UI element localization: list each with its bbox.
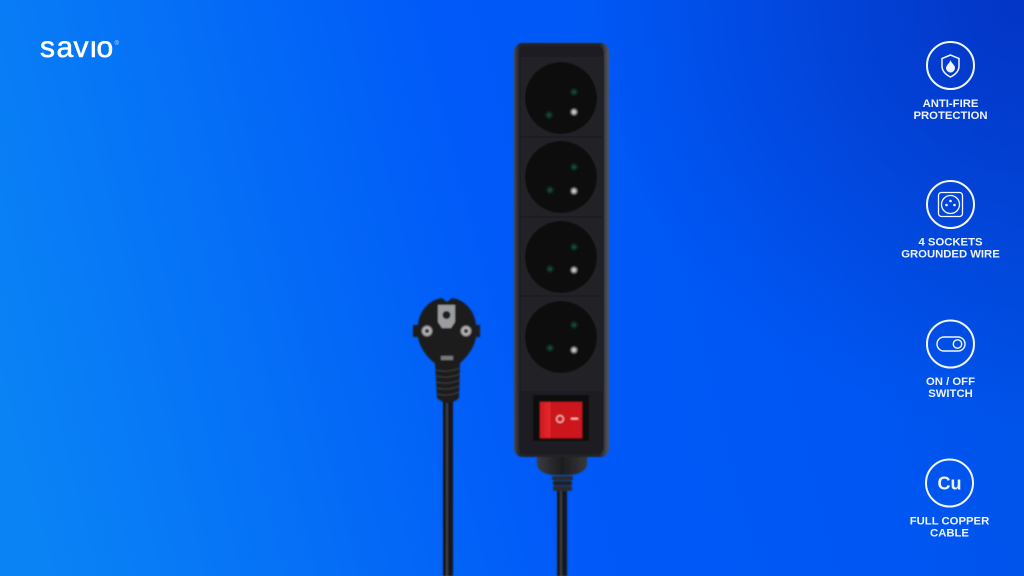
label: ON / OFF bbox=[926, 376, 975, 388]
logo: savio bbox=[40, 40, 119, 58]
feature: anti-fire protection bbox=[913, 42, 988, 122]
strip cable bbox=[557, 488, 567, 576]
right pin bbox=[460, 326, 472, 336]
socket 4 bbox=[525, 301, 597, 373]
plug grip bbox=[435, 362, 460, 403]
label: CABLE bbox=[930, 528, 969, 540]
plug cable bbox=[443, 400, 453, 576]
plug with cable bbox=[413, 298, 480, 576]
label: PROTECTION bbox=[913, 110, 988, 122]
socket 3 bbox=[525, 221, 597, 293]
strain relief collar bbox=[537, 455, 587, 491]
logo: savio: ® bbox=[114, 40, 120, 47]
earth contact bbox=[438, 305, 455, 328]
icon: Cu: Cu bbox=[938, 474, 962, 494]
label: 4 SOCKETS bbox=[918, 236, 983, 248]
socket 2 bbox=[525, 141, 597, 213]
strip housing bbox=[514, 43, 609, 457]
feature: full copper cable bbox=[910, 460, 989, 540]
label: FULL COPPER bbox=[910, 516, 989, 528]
icon: shield with flame bbox=[927, 42, 974, 89]
icon: socket bbox=[927, 181, 974, 228]
feature: 4 sockets grounded wire bbox=[901, 181, 1000, 260]
left pin bbox=[422, 326, 432, 336]
plug face bbox=[413, 298, 480, 365]
label: SWITCH bbox=[928, 388, 973, 400]
socket 1 bbox=[525, 62, 597, 134]
rocker switch bbox=[533, 395, 589, 441]
label: GROUNDED WIRE bbox=[901, 248, 1000, 260]
icon: toggle bbox=[927, 320, 974, 368]
logo: savio: savio bbox=[40, 31, 113, 64]
label: ANTI-FIRE bbox=[923, 98, 979, 110]
power strip bbox=[514, 43, 609, 576]
socket dividers bbox=[521, 137, 602, 296]
feature: on/off switch bbox=[926, 320, 975, 400]
